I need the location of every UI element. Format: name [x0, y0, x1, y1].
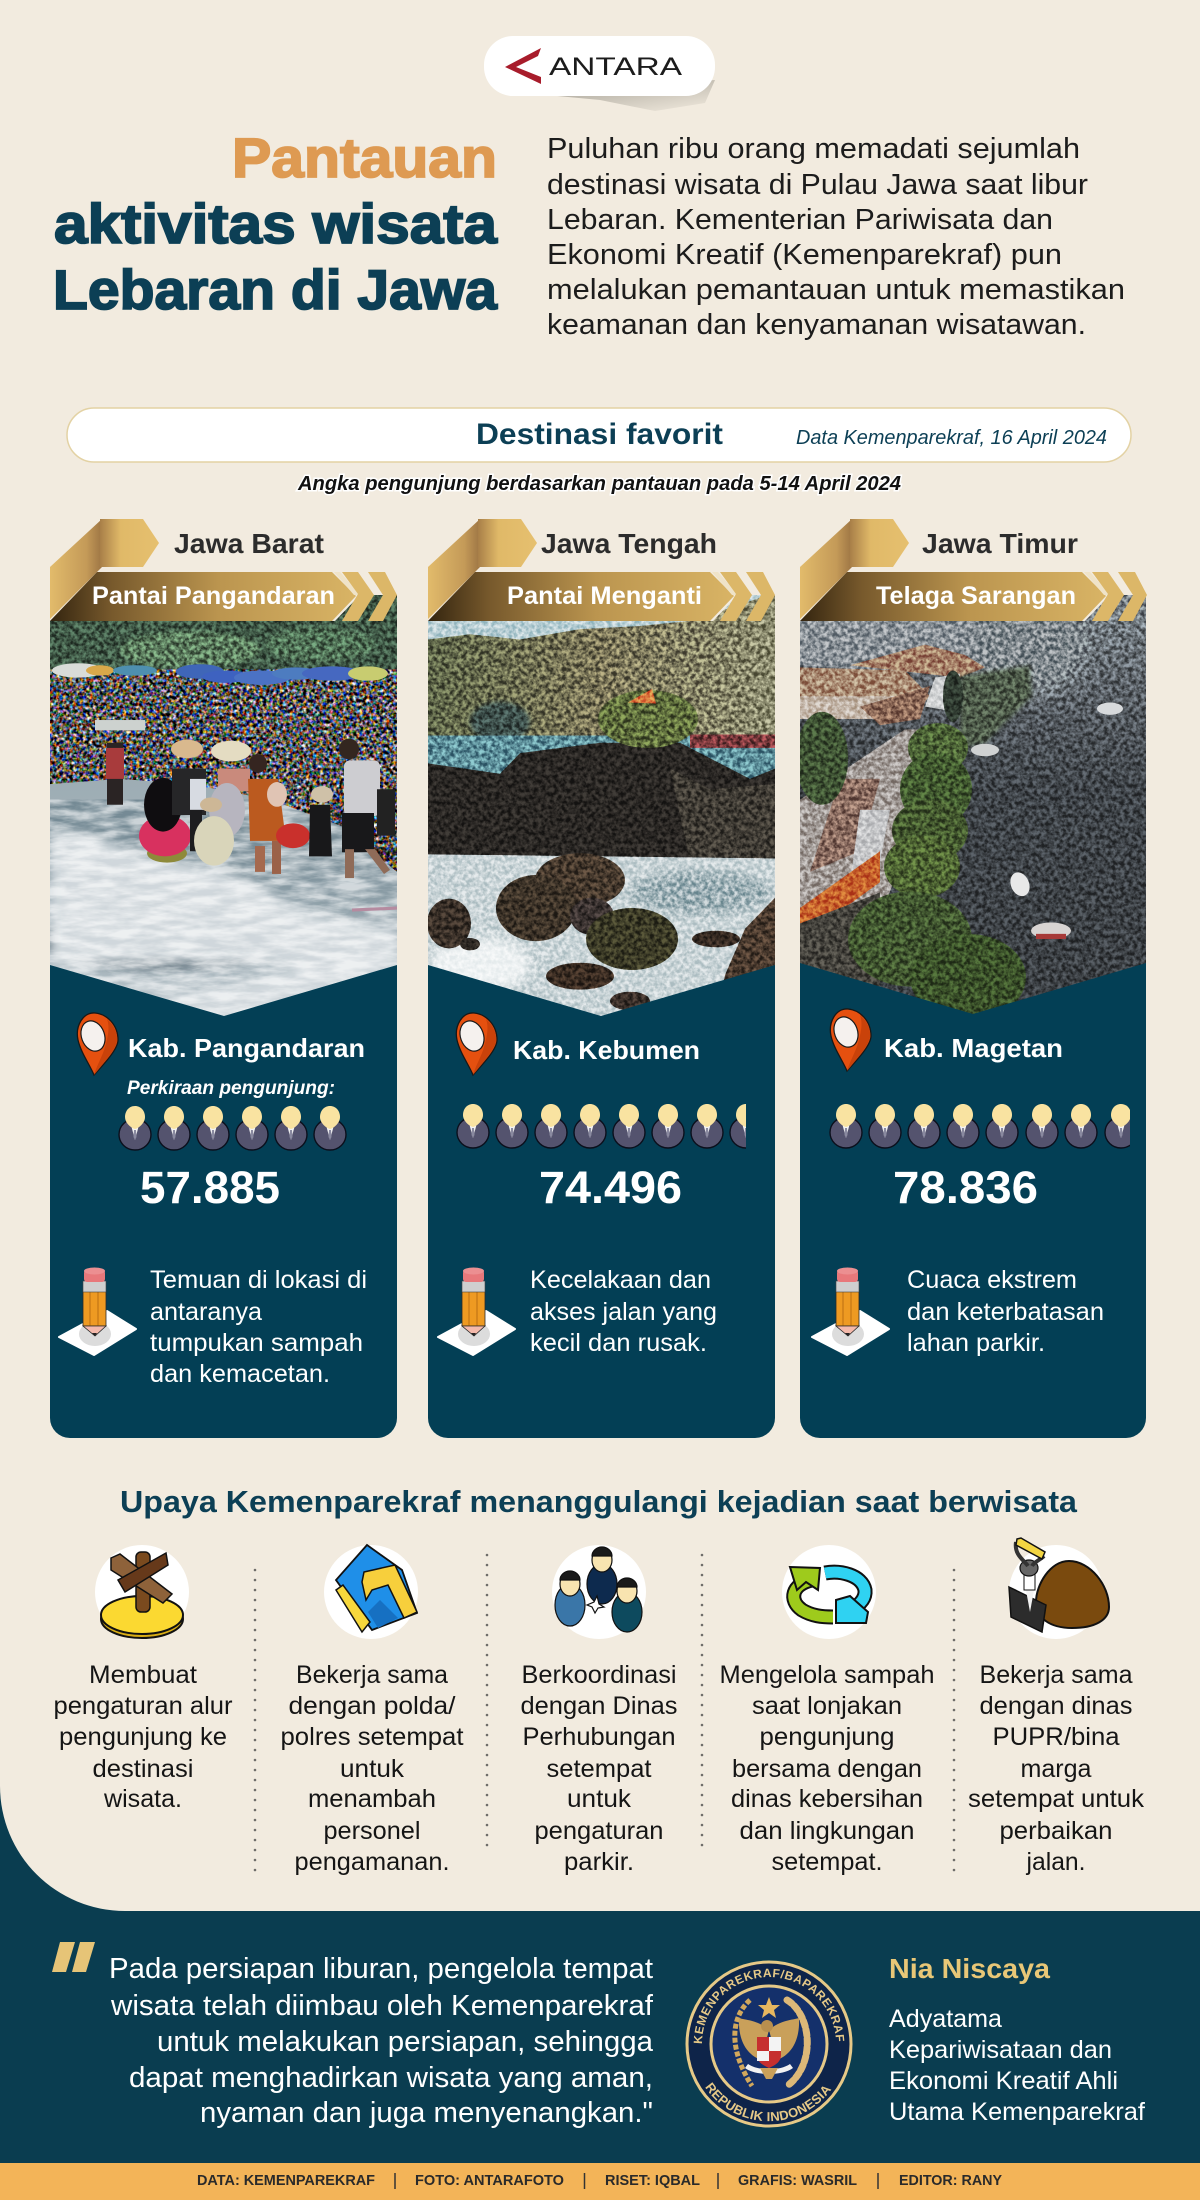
footer: credits bar: EDITOR: RANY	[899, 2172, 1002, 2189]
action text: dan lingkungan	[740, 1817, 914, 1845]
findings text: akses jalan yang	[530, 1298, 717, 1326]
label: destination: Telaga Sarangan	[876, 582, 1076, 610]
icon: crossed logs on yellow disc	[95, 1545, 189, 1639]
panel: action 1 flow management	[54, 1545, 232, 1813]
footer: credits bar: DATA: KEMENPAREKRAF	[197, 2172, 375, 2189]
icon: location pin	[77, 1013, 118, 1075]
findings text	[530, 1266, 717, 1357]
action text	[968, 1661, 1145, 1876]
visitor count: 74.496	[539, 1162, 682, 1213]
icon row: visitors	[119, 1106, 346, 1150]
findings text: tumpukan sampah	[150, 1329, 363, 1357]
seal top text: KEMENPAREKRAF/BAPAREKRAF	[694, 1968, 844, 2044]
panel: quote band	[0, 1786, 1200, 2163]
action text: Berkoordinasi	[522, 1661, 676, 1689]
label: province: Jawa Tengah	[541, 528, 717, 559]
intro paragraph: destinasi wisata di Pulau Jawa saat libur	[547, 169, 1088, 201]
ribbon: Jawa Barat / Pantai Pangandaran	[50, 519, 397, 621]
card body	[428, 621, 775, 1438]
icon: pencil on paper	[59, 1268, 136, 1355]
action text: dinas kebersihan	[731, 1785, 923, 1813]
footer: credits bar	[0, 2163, 1200, 2200]
action text: marga	[1020, 1755, 1092, 1783]
intro paragraph: Lebaran. Kementerian Pariwisata dan	[547, 204, 1053, 236]
visitor count: 57.885	[140, 1162, 280, 1213]
panel: action 5 road repair	[968, 1538, 1145, 1876]
ribbon: Jawa Timur / Telaga Sarangan	[800, 519, 1147, 621]
icon: pencil on paper	[812, 1268, 889, 1355]
action text: dengan polda/	[288, 1692, 456, 1720]
action text: Bekerja sama	[296, 1661, 448, 1689]
action text: dengan Dinas	[520, 1692, 678, 1720]
card body	[800, 621, 1146, 1438]
icon: location pin	[830, 1009, 871, 1071]
footer: credits bar: GRAFIS: WASRIL	[738, 2172, 857, 2189]
source note: Data Kemenparekraf, 16 April 2024	[796, 427, 1107, 449]
action text: pengaturan alur	[54, 1692, 232, 1720]
heading: Destinasi favorit: Destinasi favorit	[476, 418, 723, 451]
label: province: Jawa Barat	[174, 528, 324, 559]
quote text: untuk melakukan persiapan, sehingga	[157, 2026, 654, 2058]
footer: credits bar: FOTO: ANTARAFOTO	[415, 2172, 564, 2189]
action text: pengunjung ke	[59, 1723, 227, 1751]
quote text: Pada persiapan liburan, pengelola tempat	[109, 1953, 653, 1985]
icon: location pin	[456, 1013, 497, 1075]
action text: personel	[324, 1817, 420, 1845]
action text: untuk	[340, 1755, 405, 1783]
action text: dengan dinas	[980, 1692, 1132, 1720]
quote text: dapat menghadirkan wisata yang aman,	[129, 2062, 653, 2094]
icon: ANTARA red arrow mark	[505, 48, 541, 84]
action text: menambah	[308, 1785, 436, 1813]
action text: bersama dengan	[732, 1755, 922, 1783]
action text: setempat.	[772, 1848, 882, 1876]
label: destination: Pantai Pangandaran	[92, 582, 335, 610]
findings text: kecil dan rusak.	[530, 1329, 707, 1357]
icon: handshake	[324, 1545, 418, 1639]
visitor count: 78.836	[893, 1162, 1038, 1213]
intro paragraph: melalukan pemantauan untuk memastikan	[547, 274, 1125, 306]
photo: crowded Pantai Pangandaran beach	[40, 593, 397, 1027]
findings text: dan kemacetan.	[150, 1360, 330, 1388]
quote text: wisata telah diimbau oleh Kemenparekraf	[110, 1990, 654, 2022]
title	[53, 126, 498, 321]
footer: credits bar: RISET: IQBAL	[605, 2172, 700, 2189]
panel: Jawa Tengah card	[427, 519, 775, 1438]
action text: wisata.	[103, 1785, 182, 1813]
action text: Membuat	[89, 1661, 197, 1689]
photo: Telaga Sarangan lake	[796, 593, 1146, 1027]
action text	[280, 1661, 464, 1876]
speaker title: Ekonomi Kreatif Ahli	[889, 2067, 1118, 2095]
ribbon: Jawa Tengah / Pantai Menganti	[428, 519, 775, 621]
panel: Destinasi favorit heading bar	[67, 408, 1131, 462]
speaker title: Kepariwisataan dan	[889, 2036, 1112, 2064]
icon: pencil on paper	[438, 1268, 515, 1355]
action text: destinasi	[92, 1755, 194, 1783]
action text: saat lonjakan	[752, 1692, 902, 1720]
action text: Perhubungan	[522, 1723, 676, 1751]
subtitle: visitor monitoring period: Angka pengunjung berdasarkan pantauan pada 5-14 April 2024	[297, 473, 901, 495]
speaker title: Adyatama	[889, 2005, 1002, 2033]
icon row: visitors	[830, 1104, 1137, 1148]
photo: Pantai Menganti coastal rocks	[427, 593, 775, 1027]
title: Lebaran di Jawa	[53, 258, 498, 321]
action text: Mengelola sampah	[720, 1661, 934, 1689]
action text: jalan.	[1026, 1848, 1086, 1876]
action text: polres setempat	[280, 1723, 464, 1751]
icon row: visitors	[457, 1104, 762, 1148]
action text	[720, 1661, 934, 1876]
action text: setempat	[546, 1755, 652, 1783]
panel: action 3 transport coordination	[520, 1545, 678, 1876]
action text: PUPR/bina	[992, 1723, 1120, 1751]
findings text: Cuaca ekstrem	[907, 1266, 1077, 1294]
speaker title: Utama Kemenparekraf	[889, 2098, 1145, 2126]
speaker title	[889, 2005, 1145, 2126]
foreground people	[107, 743, 123, 805]
action text: perbaikan	[1000, 1817, 1112, 1845]
regency name: Kab. Pangandaran	[128, 1033, 365, 1063]
icon: quotation mark	[52, 1942, 95, 1972]
action text: pengunjung	[760, 1723, 894, 1751]
intro paragraph: Ekonomi Kreatif (Kemenparekraf) pun	[547, 239, 1062, 271]
action text: pengamanan.	[294, 1848, 450, 1876]
speaker name: Nia Niscaya	[889, 1953, 1050, 1984]
label: destination: Pantai Menganti	[507, 582, 702, 610]
findings text: Kecelakaan dan	[530, 1266, 711, 1294]
findings text: dan keterbatasan	[907, 1298, 1104, 1326]
panel: action 4 waste management	[720, 1545, 934, 1876]
action text: parkir.	[564, 1848, 634, 1876]
title: Pantauan	[232, 126, 497, 189]
action text: Bekerja sama	[980, 1661, 1133, 1689]
findings text: antaranya	[150, 1298, 262, 1326]
intro paragraph: Puluhan ribu orang memadati sejumlah	[547, 133, 1080, 165]
action text	[54, 1661, 232, 1813]
quote text	[109, 1953, 654, 2129]
findings text	[907, 1266, 1104, 1357]
panel: Jawa Timur card	[796, 519, 1147, 1438]
intro paragraph	[547, 133, 1125, 341]
action text: untuk	[567, 1785, 632, 1813]
findings text: Temuan di lokasi di	[150, 1266, 367, 1294]
regency name: Kab. Kebumen	[513, 1035, 700, 1065]
panel: Jawa Barat card	[40, 519, 397, 1438]
card body	[50, 621, 397, 1438]
quote text: nyaman dan juga menyenangkan."	[200, 2097, 653, 2129]
action text: setempat untuk	[968, 1785, 1145, 1813]
foam and water	[50, 924, 250, 975]
emblem: Kemenparekraf seal	[686, 1960, 852, 2128]
seal bottom text: REPUBLIK INDONESIA	[705, 2082, 832, 2122]
action text	[520, 1661, 678, 1876]
logo: ANTARA badge	[484, 36, 715, 111]
action text: pengaturan	[534, 1817, 664, 1845]
visitor estimate label: Perkiraan pengunjung:	[127, 1078, 335, 1099]
icon: recycling arrows	[782, 1545, 876, 1639]
label: province: Jawa Timur	[922, 528, 1078, 559]
intro paragraph: keamanan dan kenyamanan wisatawan.	[547, 309, 1086, 341]
findings text	[150, 1266, 367, 1388]
findings text: lahan parkir.	[907, 1329, 1045, 1357]
regency name: Kab. Magetan	[884, 1033, 1063, 1063]
icon: three people	[552, 1545, 646, 1639]
logo wordmark: ANTARA	[549, 53, 682, 81]
title: aktivitas wisata	[54, 192, 498, 255]
panel: action 2 police cooperation	[280, 1545, 464, 1876]
icon: shovel and soil	[1009, 1538, 1109, 1639]
heading: Upaya Kemenparekraf: Upaya Kemenparekraf menanggulangi kejadian saat berwisata	[120, 1484, 1078, 1519]
